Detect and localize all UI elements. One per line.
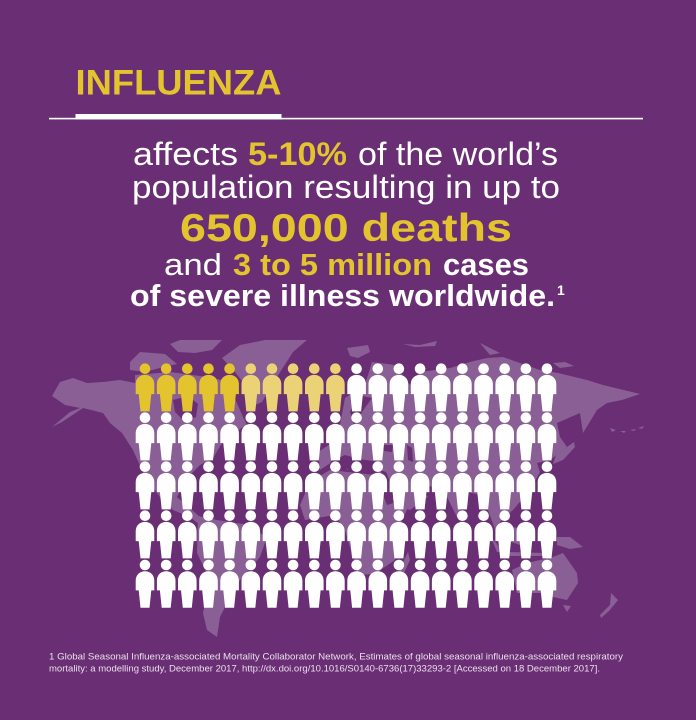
footnote: mortality: a modelling study, December 2017, http://dx.doi.org/10.1016/S0140-6736(17)33293-2 [Accessed on 18 December 2017]. — [49, 664, 600, 674]
row 1: 5 gold, 5 light gold, 10 white people — [136, 363, 556, 411]
row 3: white people — [136, 461, 556, 509]
map: north and central america — [52, 372, 247, 525]
map: new zealand — [600, 593, 618, 618]
map: australia — [512, 553, 578, 600]
footnote: 1 Global Seasonal Influenza-associated Mortality Collaborator Network, Estimates of global seasonal influenza-associated respiratory — [49, 652, 623, 662]
headline statement: 5-10% — [248, 136, 347, 172]
map: south america — [197, 516, 267, 637]
map: tasmania — [563, 605, 571, 612]
headline statement: 1 — [557, 282, 565, 298]
map: inland seas — [173, 395, 413, 500]
headline statement: cases — [443, 247, 529, 282]
headline statement: and — [164, 247, 222, 282]
headline statement: 650,000 deaths — [180, 207, 512, 250]
map: aleutian islands — [610, 426, 644, 433]
footnote — [49, 652, 623, 674]
row 2: white people — [136, 412, 556, 460]
map: canadian arctic islands — [130, 340, 222, 372]
headline statement — [130, 136, 565, 313]
world map — [52, 340, 644, 637]
map: africa — [300, 470, 413, 575]
map: arctic islands — [403, 341, 574, 368]
headline statement: population resulting in up to — [132, 169, 560, 205]
map: greenland — [222, 340, 307, 405]
map: madagascar — [399, 552, 410, 575]
headline statement: of severe illness worldwide. — [130, 278, 555, 313]
headline statement: 3 to 5 million — [233, 247, 432, 282]
map: iceland — [347, 345, 370, 358]
headline statement: of the world’s — [358, 136, 558, 172]
pictogram: people grid — [136, 363, 556, 608]
title: INFLUENZA — [76, 64, 282, 102]
headline statement: affects — [133, 136, 238, 172]
row 5: white people — [136, 560, 556, 608]
map: indonesia and new guinea — [490, 525, 583, 556]
map: eurasia — [318, 357, 640, 535]
title underline rule — [49, 114, 643, 119]
row 4: white people — [136, 510, 556, 558]
map: japan — [553, 442, 575, 464]
